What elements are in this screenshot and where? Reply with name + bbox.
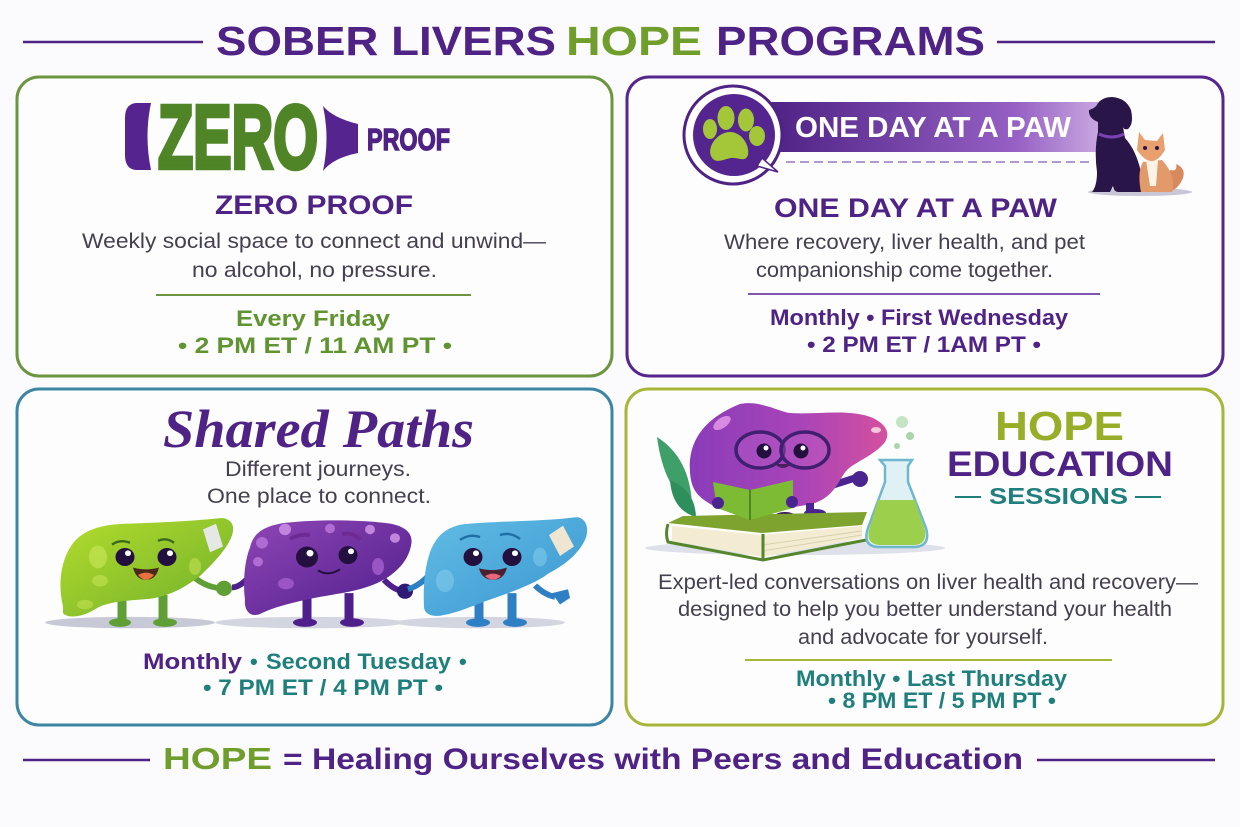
banner: One Day at a Paw [770, 102, 1098, 162]
description: companionship come together. [756, 259, 1053, 282]
description: designed to help you better understand your health [678, 598, 1172, 621]
blue liver [408, 517, 587, 627]
description: no alcohol, no pressure. [192, 259, 437, 282]
heading: One Day at a Paw: ONE DAY AT A PAW [774, 193, 1058, 223]
heading: HOPE Education Sessions: HOPE [995, 403, 1124, 449]
footer: HOPE definition: = Healing Ourselves with Peers and Education [283, 743, 1023, 776]
tagline: Different journeys. [225, 458, 411, 481]
icon: dog and cat [1088, 97, 1192, 196]
schedule: • 7 PM ET / 4 PM PT • [203, 675, 443, 700]
flask [866, 416, 927, 547]
heading: Zero Proof: ZERO PROOF [215, 190, 413, 220]
panel: Shared Paths [17, 389, 612, 725]
schedule: Monthly • First Wednesday [770, 305, 1069, 330]
illustration: three liver characters [45, 517, 587, 628]
banner: One Day at a Paw: ONE DAY AT A PAW [795, 112, 1072, 144]
heading: HOPE Education Sessions: SESSIONS [989, 483, 1128, 509]
schedule: Monthly [143, 649, 243, 674]
panel: Zero Proof [17, 77, 612, 376]
schedule [178, 306, 452, 358]
heading: HOPE Education Sessions: EDUCATION [947, 445, 1173, 484]
schedule: Monthly • Last Thursday [796, 666, 1068, 691]
green liver [60, 518, 233, 627]
description: Weekly social space to connect and unwind— [82, 230, 546, 253]
description: Expert-led conversations on liver health and recovery— [658, 571, 1198, 594]
panel: HOPE Education Sessions [626, 389, 1223, 725]
description: Where recovery, liver health, and pet [724, 231, 1085, 254]
schedule: • 8 PM ET / 5 PM PT • [828, 688, 1056, 713]
panel: One Day at a Paw [627, 77, 1223, 376]
icon: paw badge [684, 86, 782, 184]
schedule [796, 666, 1068, 713]
title: PROGRAMS [716, 18, 985, 64]
description [82, 230, 546, 282]
title: HOPE [566, 18, 702, 64]
tagline: One place to connect. [207, 485, 431, 508]
footer: HOPE definition: HOPE [163, 741, 272, 776]
schedule: • 2 PM ET / 1AM PT • [807, 332, 1041, 357]
footer: HOPE definition [23, 741, 1215, 776]
purple liver [232, 520, 413, 627]
heading: HOPE Education Sessions [947, 403, 1173, 509]
icon: Zero Proof bottle logo: PROOF [367, 122, 450, 157]
illustration: liver reading on books [645, 403, 945, 560]
title [23, 18, 1215, 64]
description [724, 231, 1085, 282]
description: and advocate for yourself. [798, 626, 1048, 649]
schedule: • [459, 649, 467, 674]
title: SOBER LIVERS [216, 18, 556, 64]
description [658, 571, 1198, 649]
tagline [207, 458, 431, 508]
schedule: • 2 PM ET / 11 AM PT • [178, 333, 452, 358]
schedule: Every Friday [236, 306, 391, 331]
schedule [770, 305, 1069, 357]
heading: Shared Paths: Shared Paths [163, 399, 474, 459]
schedule: • [250, 649, 258, 674]
icon: Zero Proof bottle logo: ZERO [158, 88, 318, 188]
schedule [143, 649, 467, 700]
schedule: Second Tuesday [266, 649, 452, 674]
